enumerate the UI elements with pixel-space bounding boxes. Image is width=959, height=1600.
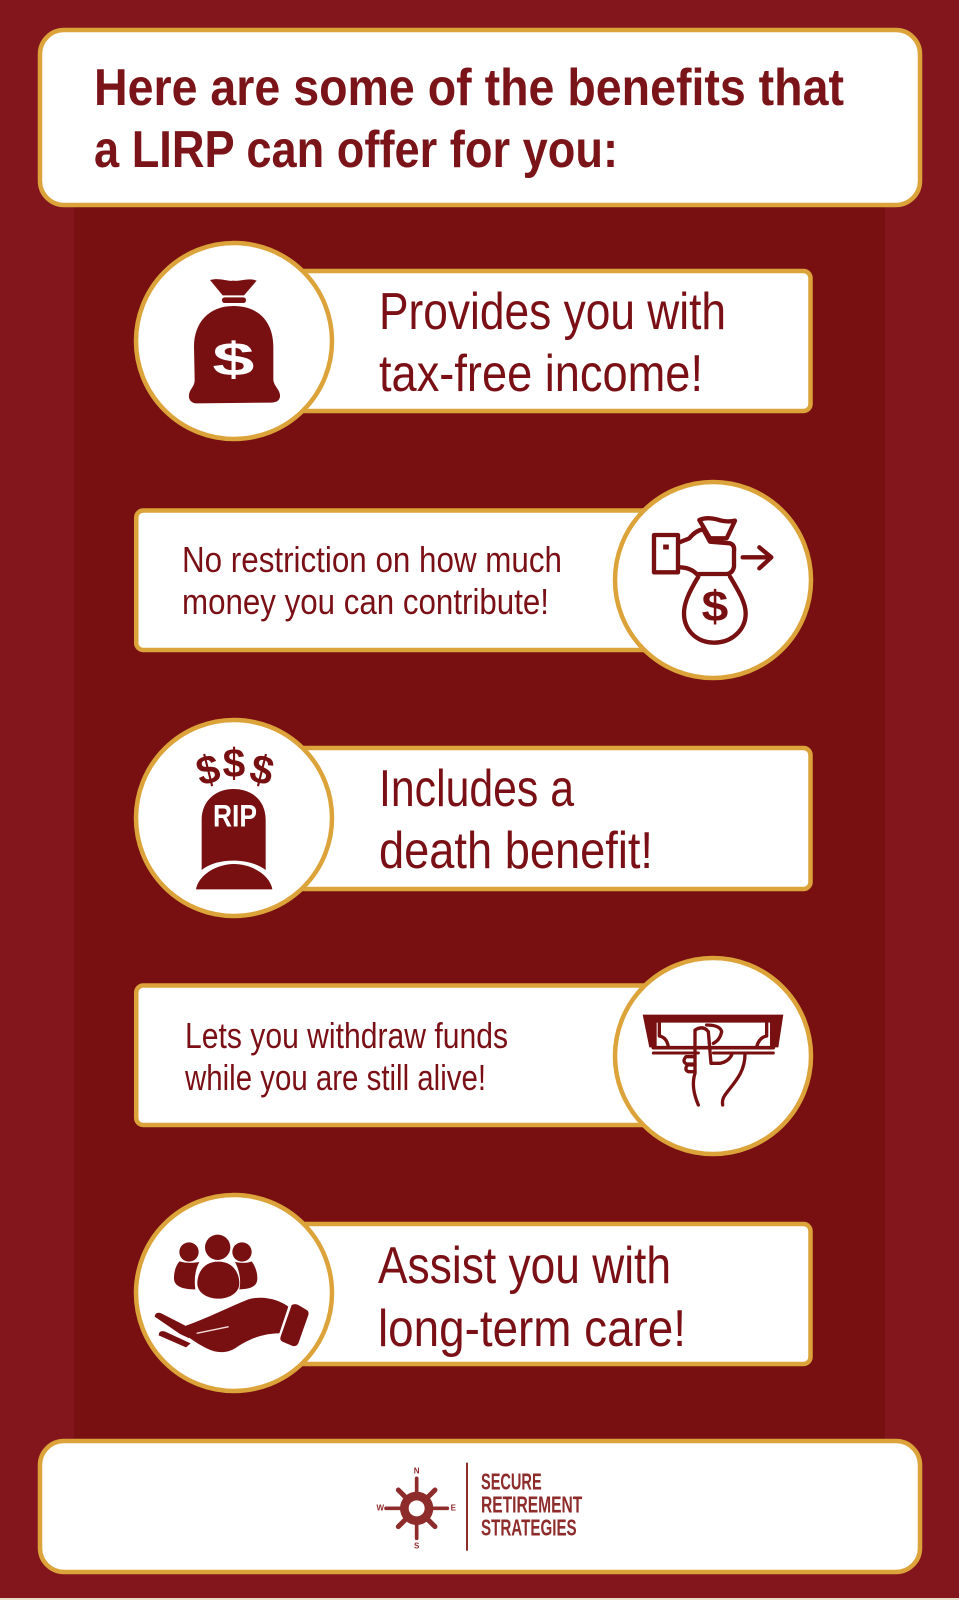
panel: no contribution limit <box>136 482 811 678</box>
panel: tax-free income <box>136 243 810 439</box>
text: long-term care: Assist you with <box>378 1237 671 1295</box>
logo: Secure Retirement Strategies: S <box>414 1542 420 1551</box>
icon: gravestone with dollars: $ <box>191 745 225 795</box>
header panel <box>40 30 920 205</box>
icon: hand with money bag <box>654 518 771 643</box>
icon: money bag: $ <box>212 333 254 386</box>
text: no contribution limit: money you can contribute! <box>182 581 549 622</box>
text: withdraw funds: while you are still alive! <box>184 1057 486 1098</box>
logo: Secure Retirement Strategies: W <box>377 1504 385 1513</box>
text: death benefit: Includes a <box>379 760 574 818</box>
logo: Secure Retirement Strategies: E <box>451 1504 457 1513</box>
text: withdraw funds <box>184 1015 508 1098</box>
text: withdraw funds: Lets you withdraw funds <box>185 1015 508 1056</box>
icon: hand taking cash <box>643 1015 783 1105</box>
text: no contribution limit: No restriction on how much <box>182 539 562 580</box>
panel: long-term care <box>136 1195 810 1391</box>
title <box>94 59 844 179</box>
panel: death benefit <box>136 720 810 916</box>
icon: hand with money bag: $ <box>702 583 728 632</box>
text: no contribution limit <box>182 539 562 622</box>
footer panel <box>40 1441 920 1572</box>
text: long-term care <box>378 1237 686 1358</box>
icon: gravestone with dollars: $ <box>223 740 246 786</box>
text: long-term care: long-term care! <box>378 1300 686 1358</box>
icon: gravestone with dollars: RIP <box>213 799 257 834</box>
logo: Secure Retirement Strategies: N <box>414 1466 420 1475</box>
logo: Secure Retirement Strategies: STRATEGIES <box>481 1515 577 1541</box>
icon: money bag <box>189 279 280 403</box>
logo: Secure Retirement Strategies <box>377 1463 582 1551</box>
icon: hand holding people <box>155 1235 309 1352</box>
logo: Secure Retirement Strategies: SECURE <box>481 1468 542 1494</box>
text: death benefit: death benefit! <box>379 822 653 880</box>
panel: withdraw funds <box>136 958 811 1154</box>
icon: gravestone with dollars: $ <box>245 745 279 795</box>
text: death benefit <box>379 760 653 880</box>
icon: gravestone with dollars <box>191 740 279 889</box>
title: a LIRP can offer for you: <box>94 121 618 179</box>
title: Here are some of the benefits that <box>94 59 844 117</box>
text: tax-free income: Provides you with <box>379 283 726 341</box>
text: tax-free income: tax-free income! <box>379 345 703 403</box>
text: tax-free income <box>379 283 726 403</box>
logo: Secure Retirement Strategies: RETIREMENT <box>481 1492 582 1518</box>
